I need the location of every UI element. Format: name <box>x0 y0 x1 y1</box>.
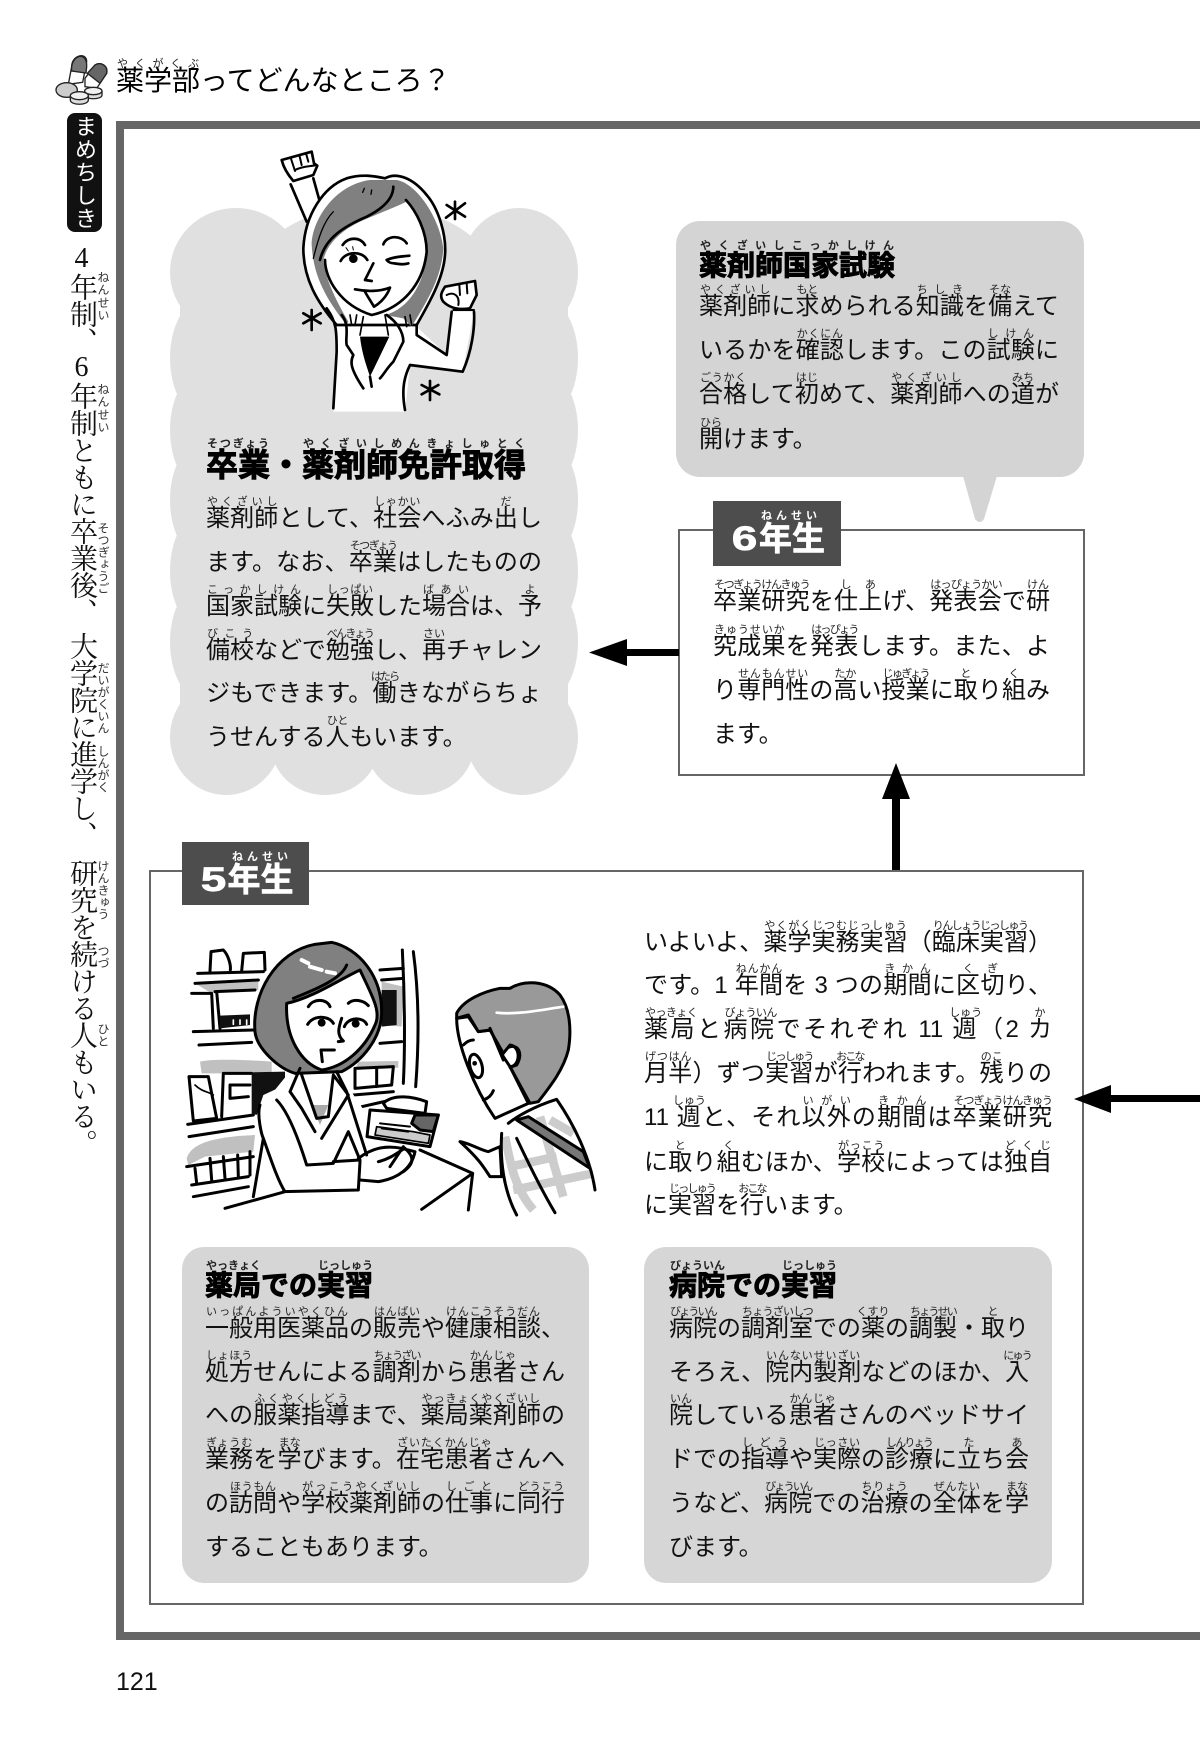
tag: 6年生: 6 <box>732 520 757 558</box>
text: exam body: ごうかく <box>700 372 746 384</box>
text: 6th year body: 究成果を発表します。また、よ <box>713 633 1050 660</box>
text: graduation body: しゃかい <box>374 496 420 508</box>
heading: 病院での実習: 病院での実習 <box>669 1270 837 1301</box>
text: 5th year body: おこな <box>836 1051 864 1063</box>
text: hospital body: しんりょう <box>886 1437 932 1449</box>
side note: vertical text: ひと <box>96 1023 110 1047</box>
text: graduation body: ばあい <box>423 584 469 596</box>
text: 5th year body: に取り組むほか、学校によっては独自 <box>644 1149 1052 1176</box>
arrow: 6th year to graduation <box>589 639 679 666</box>
text: 5th year body: か <box>1034 1007 1046 1019</box>
text: 6th year body <box>713 578 1050 748</box>
text: 5th year body: きかん <box>878 1095 926 1107</box>
panel: hospital training <box>644 1247 1052 1583</box>
tag: 6年生 <box>713 501 841 566</box>
tag: 5年生: 年生 <box>227 861 293 898</box>
tag: 6年生: ねんせい <box>761 510 821 522</box>
side note: vertical text: けんきゅう <box>96 860 110 920</box>
text: hospital body: 院している患者さんのベッドサイ <box>669 1402 1029 1429</box>
text: pharmacy body: ほうもん <box>230 1481 276 1493</box>
text: 6th year body: ます。 <box>713 721 783 748</box>
text: hospital body <box>669 1306 1031 1561</box>
text: 6th year body: そつぎょうけんきゅう <box>714 579 809 591</box>
text: hospital body: と <box>988 1306 998 1318</box>
text: そつぎょう <box>207 438 269 450</box>
text: 6th year body: と <box>960 668 971 680</box>
text: exam body: ひら <box>700 417 722 429</box>
text: 5th year body: おこな <box>738 1183 766 1195</box>
text: pharmacy body: 処方せんによる調剤から患者さん <box>205 1359 565 1386</box>
title: 薬学部ってどんなところ？ <box>116 65 451 96</box>
text: exam body: 薬剤師に求められる知識を備えて <box>699 293 1059 320</box>
text: hospital body: うなど、病院での治療の全体を学 <box>669 1490 1029 1517</box>
text: graduation body: さい <box>423 628 445 640</box>
text: hospital body: あ <box>1012 1437 1022 1449</box>
text: exam body: 合格して初めて、薬剤師への道が <box>699 381 1059 408</box>
side note: vertical text: 大学院に進学し、 <box>66 632 97 848</box>
heading: 病院での実習: びょういん <box>670 1260 725 1272</box>
text: exam body: みち <box>1012 372 1034 384</box>
text: hospital body: ちょうざいしつ <box>742 1306 812 1318</box>
text: pharmacy body: ちょうざい <box>374 1350 420 1362</box>
text: pharmacy body: いっぱんよういやくひん <box>206 1306 348 1318</box>
text: graduation body: うせんする人もいます。 <box>206 724 467 751</box>
text: pharmacy body: の訪問や学校薬剤師の仕事に同行 <box>205 1490 565 1517</box>
illustration: pharmacist and patient <box>185 940 596 1217</box>
text: 5th year body: げつはん <box>645 1051 691 1063</box>
text: hospital body: いんないせいざい <box>766 1350 860 1362</box>
text: exam body: ちしき <box>917 284 963 296</box>
side note: vertical text: つづ <box>96 945 110 969</box>
side note: vertical text: 4年制、 <box>66 243 97 354</box>
text: 6th year body: く <box>1008 668 1019 680</box>
page number: 121 <box>116 1668 158 1696</box>
text: 5th year body: と <box>675 1140 686 1152</box>
text: hospital body: ドでの指導や実際の診療に立ち会 <box>669 1446 1029 1473</box>
text: hospital body: そろえ、院内製剤などのほか、入 <box>669 1359 1029 1386</box>
tag: 6年生: 年生 <box>759 520 825 557</box>
text: exam body: しけん <box>988 328 1034 340</box>
text: hospital body: ちりょう <box>861 1481 908 1493</box>
text: 6th year body: けん <box>1027 579 1049 591</box>
text: pharmacy body: ぎょうむ <box>206 1437 252 1449</box>
text: 5th year body: いよいよ、薬学実務実習（臨床実習） <box>644 929 1052 956</box>
text: 5th year body: きかん <box>884 963 931 975</box>
text: graduation body: はたら <box>371 671 398 683</box>
text: 5th year body: ねんかん <box>736 963 782 975</box>
text: 5th year body: ぎ <box>987 963 998 975</box>
text: graduation body: べんきょう <box>327 628 373 640</box>
text: pharmacy body <box>205 1306 565 1561</box>
text: graduation body: 薬剤師として、社会へふみ出し <box>206 505 542 532</box>
side note: vertical text: ねんせい <box>96 383 110 433</box>
text: 5th year body: 月半）ずつ実習が行われます。残りの <box>644 1060 1052 1087</box>
text: pharmacy body: しごと <box>446 1481 492 1493</box>
text: pharmacy body: かんじゃ <box>470 1350 516 1362</box>
text: graduation body: ます。なお、卒業はしたものの <box>206 549 542 576</box>
text: pharmacy body: どうこう <box>518 1481 564 1493</box>
text: 5th year body: びょういん <box>725 1007 776 1019</box>
main frame <box>116 121 1200 1640</box>
text: hospital body: びょういん <box>765 1481 811 1493</box>
text: 5th year body: しゅう <box>673 1095 706 1107</box>
text: 5th year body: く <box>723 1140 734 1152</box>
text: 5th year body: のこ <box>981 1051 1003 1063</box>
text: pharmacy body: への服薬指導まで、薬局薬剤師の <box>205 1402 565 1429</box>
text: graduation body: 備校などで勉強し、再チャレン <box>206 637 542 664</box>
text: pharmacy body: がっこうやくざいし <box>302 1481 420 1493</box>
text: 5th year body: やくがくじつむじっしゅう <box>764 920 907 932</box>
text: exam body: かくにん <box>797 328 843 340</box>
text: exam body: はじ <box>796 372 818 384</box>
text: pharmacy body: まな <box>279 1437 301 1449</box>
text: hospital body: ぜんたい <box>934 1481 980 1493</box>
text: 5th year body: です。1 年間を 3 つの期間に区切り、 <box>644 972 1052 999</box>
side note: vertical text: ねんせい <box>96 271 110 321</box>
heading: 薬剤師国家試験: やくざいしこっかしけん <box>700 240 894 252</box>
text: exam body: そな <box>989 284 1011 296</box>
text: hospital body: にゅう <box>1003 1350 1031 1362</box>
text: graduation body: 国家試験に失敗した場合は、予 <box>206 593 542 620</box>
text: pharmacy body: やっきょくやくざいし <box>422 1393 540 1405</box>
text: 5th year body: そつぎょうけんきゅう <box>954 1095 1051 1107</box>
text: hospital body: 病院の調剤室での薬の調製・取り <box>669 1315 1029 1342</box>
side note: vertical text: そつぎょうご <box>96 522 110 594</box>
panel: 5th year <box>149 870 1084 1605</box>
text: pharmacy body: 業務を学びます。在宅患者さんへ <box>205 1446 565 1473</box>
text: 5th year body: りんしょうじっしゅう <box>933 920 1027 932</box>
tag: 5年生: 5 <box>200 861 226 899</box>
text: 6th year body: せんもんせい <box>738 668 808 680</box>
text: hospital body: びます。 <box>669 1534 763 1561</box>
text: exam body: やくざいし <box>700 284 770 296</box>
text: graduation body: だ <box>500 496 511 508</box>
heading: 薬局での実習: じっしゅう <box>318 1260 373 1272</box>
arrow: 5th year to 6th year <box>882 763 910 870</box>
text: graduation body: こっかしけん <box>207 584 301 596</box>
text: pharmacy body: することもあります。 <box>205 1534 443 1561</box>
tag: 5年生: ねんせい <box>232 851 292 863</box>
panel: graduation cloud <box>170 208 578 795</box>
text: 6th year body: し <box>841 579 852 591</box>
side note: vertical text <box>66 243 110 1156</box>
text: 5th year body: く <box>963 963 974 975</box>
text: pharmacy body: はんばい <box>374 1306 420 1318</box>
text: exam body: 開けます。 <box>699 426 817 453</box>
text: 5th year body: やっきょく <box>645 1007 696 1019</box>
text: 6th year body: り専門性の高い授業に取り組み <box>713 677 1050 704</box>
text: 6th year body: たか <box>834 668 856 680</box>
text: exam body: やくざいし <box>891 372 962 384</box>
text: pharmacy body: ざいたくかんじゃ <box>397 1437 492 1449</box>
panel: national exam callout <box>676 221 1084 522</box>
text: graduation body: ジもできます。働きながらちょ <box>206 680 542 707</box>
side note: vertical text: しんがく <box>96 745 110 793</box>
text: hospital body: た <box>964 1437 974 1449</box>
text: やくざいしめんきょしゅとく <box>303 438 525 450</box>
side note: vertical text: 6年制ともに卒業後、 <box>66 352 97 625</box>
text: hospital body: いん <box>670 1393 692 1405</box>
text: pharmacy body: しょほう <box>206 1350 252 1362</box>
icon: pills and capsules <box>55 55 108 105</box>
tag: 5年生 <box>182 842 309 905</box>
text: 5th year body: じっしゅう <box>669 1183 715 1195</box>
text: graduation body: しっぱい <box>327 584 373 596</box>
text: 5th year body: いがい <box>803 1095 851 1107</box>
heading: 薬局での実習: やっきょく <box>206 1260 261 1272</box>
title: やくがくぶ <box>117 58 199 70</box>
heading: 病院での実習: じっしゅう <box>782 1260 837 1272</box>
text: graduation body: ひと <box>327 715 348 727</box>
text: graduation body: そつぎょう <box>350 540 396 552</box>
text: 6th year body: じゅぎょう <box>883 668 929 680</box>
text: 6th year body: はっぴょう <box>811 624 858 636</box>
text: exam body: いるかを確認します。この試験に <box>699 337 1059 364</box>
side note: vertical text: だいがくいん <box>96 662 110 734</box>
text: 5th year body: に実習を行います。 <box>644 1192 858 1219</box>
text: 6th year body: きゅうせいか <box>714 624 785 636</box>
text: hospital body: まな <box>1006 1481 1028 1493</box>
text: pharmacy body: ふくやくしどう <box>254 1393 348 1405</box>
text: hospital body: くすり <box>856 1306 890 1318</box>
text: 5th year body: じっしゅう <box>766 1051 813 1063</box>
text: 6th year body: あ <box>865 579 876 591</box>
side note: vertical text: 研究を続ける人もいる。 <box>66 859 97 1156</box>
text: hospital body: びょういん <box>670 1306 716 1318</box>
heading: 卒業・薬剤師免許取得: 卒業・薬剤師免許取得 <box>206 447 526 483</box>
panel: 6th year <box>678 529 1085 776</box>
text: pharmacy body: けんこうそうだん <box>446 1306 540 1318</box>
text: 5th year body: がっこう <box>838 1140 884 1152</box>
text: 6th year body: はっぴょうかい <box>930 579 1001 591</box>
heading: 薬局での実習: 薬局での実習 <box>205 1270 373 1301</box>
side tag: まめちしき <box>67 113 102 232</box>
text: exam body <box>699 284 1059 453</box>
text: 5th year body <box>644 920 1052 1219</box>
text: hospital body: かんじゃ <box>790 1393 836 1405</box>
text: 5th year body: しゅう <box>949 1007 982 1019</box>
text: 5th year body: 薬局と病院でそれぞれ 11 週（2 カ <box>644 1016 1052 1043</box>
text: 5th year body: 11 週と、それ以外の期間は卒業研究 <box>644 1104 1052 1131</box>
text: graduation body <box>206 496 542 751</box>
text: exam body: もと <box>797 284 818 296</box>
text: hospital body: しどう <box>742 1437 788 1449</box>
text: 5th year body: どくじ <box>1005 1140 1051 1152</box>
panel: pharmacy training <box>182 1247 589 1583</box>
text: graduation body: やくざいし <box>207 496 277 508</box>
text: hospital body: ちょうせい <box>910 1306 956 1318</box>
illustration: cheering woman <box>280 150 478 412</box>
text: hospital body: じっさい <box>814 1437 860 1449</box>
side tag: まめちしき: まめちしき <box>72 115 97 230</box>
heading: 薬剤師国家試験: 薬剤師国家試験 <box>699 250 895 281</box>
arrow: into 5th year <box>1074 1085 1200 1113</box>
text: graduation body: びこう <box>207 628 253 640</box>
text: pharmacy body: 一般用医薬品の販売や健康相談、 <box>205 1315 565 1342</box>
text: 6th year body: 卒業研究を仕上げ、発表会で研 <box>713 588 1050 615</box>
text: graduation body: よ <box>524 584 536 596</box>
